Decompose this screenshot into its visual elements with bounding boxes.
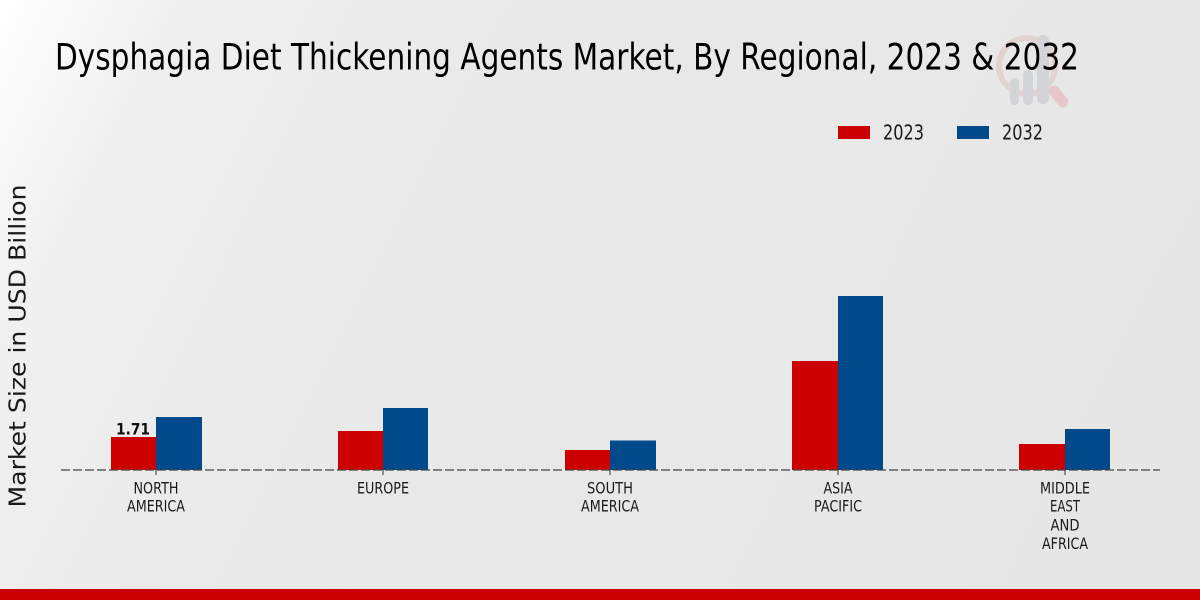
y axis label: Market Size in USD Billion: [6, 184, 32, 508]
icon: watermark magnifier with bars: [999, 35, 1063, 105]
footer bar: [0, 589, 1200, 600]
legend: [838, 120, 1043, 144]
bars: North America: [111, 417, 202, 470]
x label: Middle East and Africa: MIDDLE: [1040, 478, 1090, 498]
x label: Middle East and Africa: EAST: [1050, 496, 1080, 516]
x label: Asia Pacific: PACIFIC: [814, 496, 862, 516]
x label: Europe: EUROPE: [357, 478, 409, 498]
data label: 1.71: 1.71: [116, 420, 150, 438]
x label: North America: AMERICA: [127, 496, 185, 516]
x label: Asia Pacific: [814, 478, 862, 516]
x label: Middle East and Africa: [1040, 478, 1090, 553]
x label: Middle East and Africa: AND: [1050, 516, 1080, 534]
x label: South America: [581, 478, 639, 516]
legend item: 2032: 2032: [1002, 120, 1043, 144]
x label: North America: [127, 478, 185, 516]
x label: Middle East and Africa: AFRICA: [1042, 534, 1088, 553]
legend item: 2032: [957, 120, 1043, 144]
x label: South America: AMERICA: [581, 496, 639, 516]
legend item: 2023: 2023: [883, 120, 924, 144]
legend item: 2023: [838, 120, 924, 144]
x label: South America: SOUTH: [587, 478, 633, 498]
bar chart: [61, 296, 1160, 553]
x label: Asia Pacific: ASIA: [824, 478, 853, 498]
bars: Middle East and Africa: [1019, 429, 1110, 470]
bars: Asia Pacific: [792, 296, 883, 470]
x axis baseline: [61, 469, 1160, 471]
bars: Europe: [338, 408, 428, 470]
bars: South America: [565, 440, 656, 470]
x label: North America: NORTH: [134, 478, 178, 498]
